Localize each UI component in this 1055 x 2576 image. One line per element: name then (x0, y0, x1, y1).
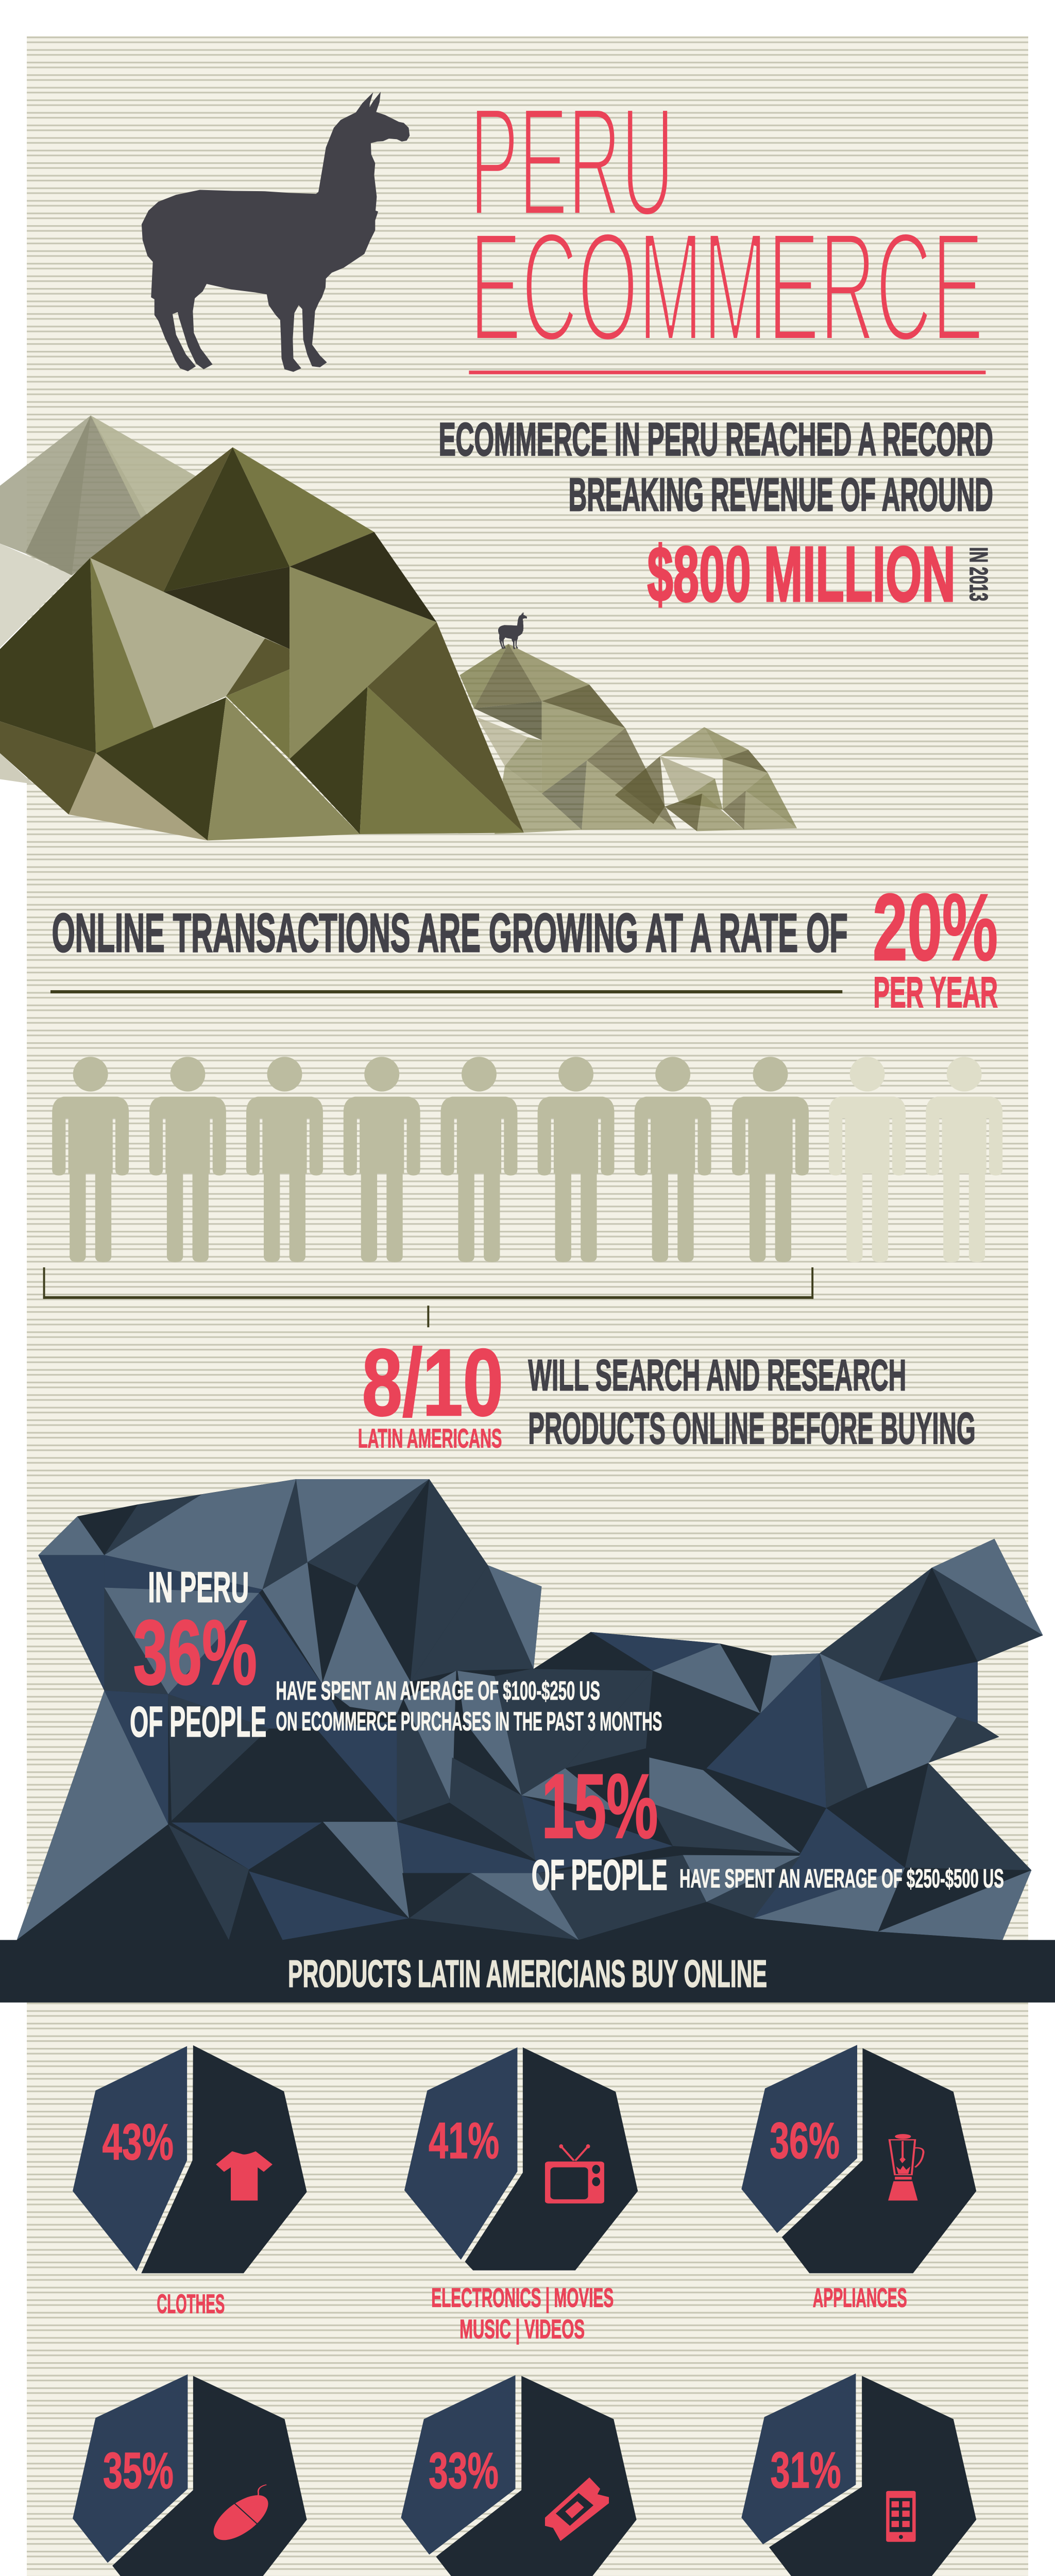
illustration: olive mountains (0, 415, 797, 840)
background mountain (0, 415, 200, 784)
category: tickets (397, 2375, 642, 2576)
pictogram: 8 of 10 people (52, 1057, 1002, 1262)
category: computer hardware: 35% (103, 2442, 174, 2499)
icon: television (545, 2144, 604, 2204)
category: appliances (741, 2045, 976, 2313)
category: tickets: 33% (429, 2442, 499, 2499)
section: spending over blue mountains (0, 1479, 1055, 2003)
revenue year: IN 2013 (964, 547, 992, 601)
category: apps (741, 2374, 976, 2576)
section: spending over blue mountains: IN PERU (148, 1564, 249, 1612)
section: spending over blue mountains: OF PEOPLE (532, 1851, 668, 1899)
llama silhouette (142, 92, 410, 372)
icon: ticket (545, 2478, 609, 2541)
section: growth and people: 8/10 (362, 1329, 503, 1435)
section: product categories (73, 2045, 976, 2576)
small mountain (615, 727, 797, 831)
icon: blender (888, 2134, 924, 2200)
growth rule (50, 990, 842, 993)
section: growth and people: LATIN AMERICANS (358, 1423, 502, 1453)
title: Peru Ecommerce (477, 111, 979, 340)
tiny llama on peak (498, 612, 527, 649)
section: spending over blue mountains: 15% (541, 1755, 658, 1857)
category: electronics: MUSIC | VIDEOS (460, 2314, 585, 2344)
icon: computer mouse (203, 2485, 279, 2545)
section: product categories: ELECTRONICS | MOVIES (431, 2283, 614, 2313)
large mountain (0, 447, 524, 840)
section: spending over blue mountains: OF PEOPLE (130, 1698, 266, 1746)
title underline (469, 370, 985, 374)
category: computer hardware (73, 2374, 307, 2576)
category: electronics: 41% (429, 2112, 499, 2170)
category: appliances: 36% (770, 2112, 840, 2170)
icon: t-shirt (216, 2151, 273, 2200)
category: apps: 31% (771, 2442, 841, 2499)
section: title and headline (439, 75, 993, 618)
category: clothes: CLOTHES (157, 2289, 225, 2319)
products band (0, 1940, 1055, 2003)
medium mountain (460, 644, 676, 834)
category: electronics (404, 2047, 638, 2344)
section: spending over blue mountains: 36% (133, 1601, 257, 1704)
bracket (43, 1267, 813, 1327)
category: clothes: 43% (103, 2113, 174, 2171)
title: Peru Ecommerce: PERU (470, 75, 674, 249)
illustration: blue mountains (17, 1479, 1043, 1940)
category: clothes (73, 2045, 307, 2319)
section: growth and people (43, 874, 1002, 1453)
icon: smartphone (886, 2491, 916, 2542)
